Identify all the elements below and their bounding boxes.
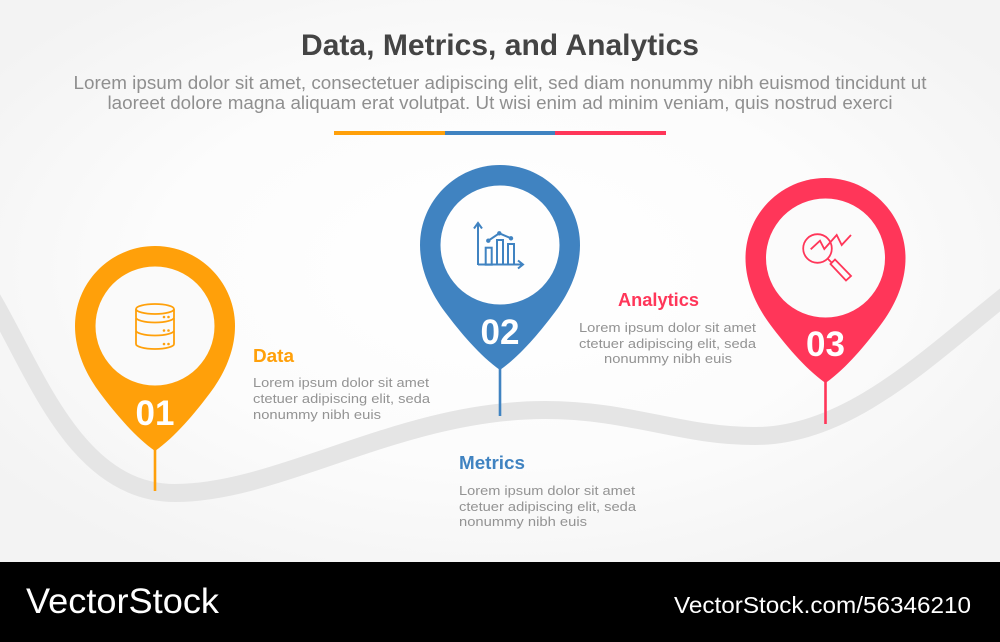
footer bar xyxy=(0,562,1000,642)
footer url: VectorStock.com/56346210 xyxy=(674,592,971,618)
wavy road xyxy=(0,292,1000,493)
pin 01 xyxy=(75,246,235,491)
subtitle xyxy=(74,73,926,113)
title underline xyxy=(334,131,666,135)
text block: Metrics: ctetuer adipiscing elit, seda xyxy=(459,499,637,514)
title: Data, Metrics, and Analytics xyxy=(301,29,699,62)
text block: Analytics: ctetuer adipiscing elit, seda xyxy=(579,336,757,351)
number 01: 01 xyxy=(136,394,174,433)
text block: Data: Data xyxy=(253,346,295,366)
text block: Data: Lorem ipsum dolor sit amet xyxy=(253,375,429,390)
pin 02 xyxy=(420,165,580,416)
text block: Analytics: Analytics xyxy=(618,290,699,310)
subtitle: laoreet dolore magna aliquam erat volutpat. Ut wisi enim ad minim veniam, quis nostrud exerci xyxy=(108,93,892,113)
text block: Metrics: Metrics xyxy=(459,453,525,473)
text block: Metrics: nonummy nibh euis xyxy=(459,514,588,529)
text block: Data xyxy=(253,346,431,422)
text block: Data: ctetuer adipiscing elit, seda xyxy=(253,391,431,406)
number 02: 02 xyxy=(481,313,519,352)
subtitle: Lorem ipsum dolor sit amet, consectetuer adipiscing elit, sed diam nonummy nibh euismod tincidunt ut xyxy=(74,73,926,93)
text block: Metrics: Lorem ipsum dolor sit amet xyxy=(459,483,635,498)
icon: magnifier over trend line xyxy=(803,234,851,280)
text block: Analytics: Lorem ipsum dolor sit amet xyxy=(579,320,756,335)
text block: Data: nonummy nibh euis xyxy=(253,407,382,422)
icon: bar chart xyxy=(474,223,523,268)
pin 03 xyxy=(746,178,906,424)
icon: database xyxy=(136,304,174,349)
number 03: 03 xyxy=(806,325,845,364)
text block: Analytics xyxy=(579,290,757,366)
footer logo: VectorStock xyxy=(26,582,220,621)
text block: Analytics: nonummy nibh euis xyxy=(604,351,733,366)
text block: Metrics xyxy=(459,453,637,529)
